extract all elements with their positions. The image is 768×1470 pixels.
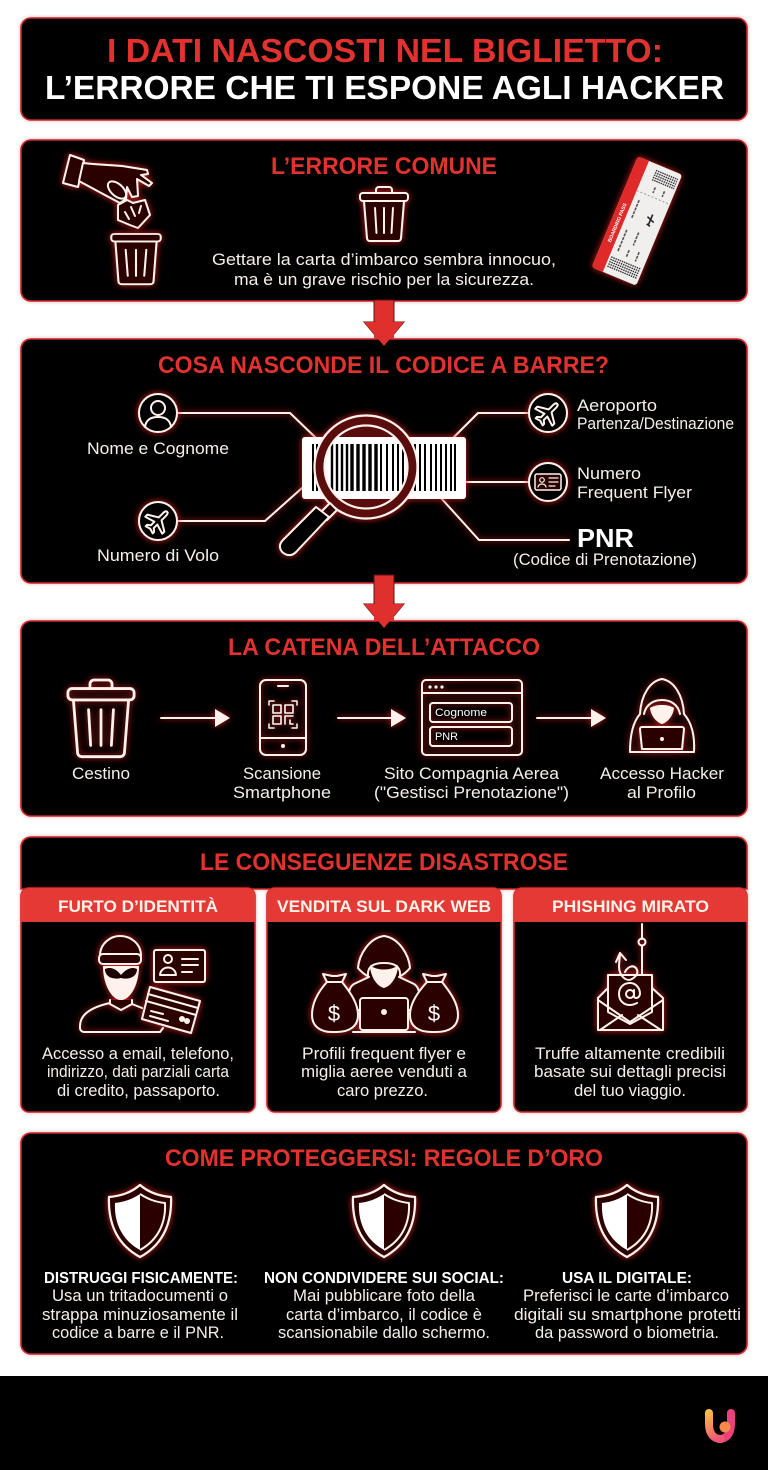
- panel: barcode data: [21, 322, 747, 583]
- icon: smartphone: [260, 680, 306, 755]
- text: rule 3: digitali su smartphone protetti: [514, 1305, 741, 1324]
- barcode with magnifier: [280, 416, 466, 555]
- panel: protection: [21, 1133, 747, 1354]
- label: frequent flyer: [577, 464, 692, 502]
- labels: chain: Sito Compagnia Aerea: [384, 764, 560, 783]
- card: furto d'identità: [21, 888, 255, 1112]
- icon: thief with cards: [80, 936, 205, 1033]
- text: dark web: caro prezzo.: [337, 1081, 428, 1100]
- arrow: overlap of second arrow: [364, 604, 404, 628]
- icon: hand dropping paper: [63, 155, 152, 228]
- text: rule 1: DISTRUGGI FISICAMENTE:: [44, 1270, 238, 1287]
- label: aeroporto: Aeroporto: [577, 396, 657, 415]
- label: nome e cognome: Nome e Cognome: [87, 439, 229, 458]
- card: furto d'identità: FURTO D’IDENTITÀ: [58, 897, 218, 916]
- text: rule 1: codice a barre e il PNR.: [52, 1323, 224, 1342]
- panel: attack chain: [21, 604, 747, 816]
- arrow: chain 3: [537, 709, 606, 727]
- labels: chain: [72, 764, 724, 802]
- icon: trash under hand: [111, 234, 161, 284]
- icon: shield 1: [109, 1185, 171, 1257]
- icon: plane left: [139, 502, 177, 540]
- text: description: Gettare la carta d’imbarco sembra innocuo,: [212, 250, 556, 269]
- text: phishing: Truffe altamente credibili: [535, 1044, 725, 1063]
- text: dark web: [301, 1044, 468, 1100]
- text: rule 2: scansionabile dallo schermo.: [278, 1323, 490, 1342]
- text: phishing: del tuo viaggio.: [574, 1081, 686, 1100]
- browser field labels: [435, 707, 487, 743]
- text: rule 1: Usa un tritadocumenti o: [52, 1286, 228, 1305]
- dollar signs: $: [328, 1001, 340, 1026]
- arrow: overlap of first arrow: [364, 322, 404, 346]
- text: dark web: Profili frequent flyer e: [302, 1044, 466, 1063]
- heading: l'errore comune: L’ERRORE COMUNE: [271, 153, 497, 180]
- icon: browser window: [422, 680, 522, 755]
- icon: boarding pass: BOARDING PASS: [607, 202, 629, 243]
- dollar signs: $: [428, 1001, 440, 1026]
- text: dark web: miglia aeree venduti a: [301, 1062, 468, 1081]
- text: rule 2: [264, 1270, 504, 1342]
- label: pnr: PNR: [577, 523, 634, 553]
- labels: chain: al Profilo: [627, 783, 696, 802]
- text: rule 2: NON CONDIVIDERE SUI SOCIAL:: [264, 1270, 504, 1287]
- label: numero di volo: Numero di Volo: [97, 546, 219, 565]
- arrow: chain 1: [161, 709, 230, 727]
- text: rule 1: [42, 1270, 238, 1342]
- text: rule 3: Preferisci le carte d’imbarco: [523, 1286, 729, 1305]
- card: phishing: PHISHING MIRATO: [552, 897, 709, 916]
- arrow: first down arrow: [364, 300, 404, 346]
- icon: boarding pass: [592, 156, 682, 286]
- text: furto: indirizzo, dati parziali carta: [47, 1062, 229, 1081]
- icon: plane right: [529, 394, 567, 432]
- label: frequent flyer: Numero: [577, 464, 641, 483]
- barcode bars: [313, 444, 455, 491]
- label: pnr: [513, 523, 697, 569]
- text: furto: [42, 1044, 234, 1100]
- icon: hacker with money bags: [312, 936, 458, 1032]
- connector lines: [178, 413, 569, 540]
- arrow: second down arrow: [364, 575, 404, 628]
- panel: title: [21, 18, 747, 120]
- title line 1: I DATI NASCOSTI NEL BIGLIETTO:: [107, 32, 663, 69]
- arrow: chain 2: [338, 709, 406, 727]
- text: rule 2: carta d’imbarco, il codice è: [286, 1305, 482, 1324]
- text: description: [212, 250, 556, 289]
- text: rule 2: Mai pubblicare foto della: [293, 1286, 476, 1305]
- label: aeroporto: Partenza/Destinazione: [577, 414, 734, 433]
- label: frequent flyer: Frequent Flyer: [577, 483, 692, 502]
- browser field labels: PNR: [435, 731, 458, 743]
- text: furto: di credito, passaporto.: [57, 1081, 220, 1100]
- labels: chain: Accesso Hacker: [600, 764, 724, 783]
- heading: protection: COME PROTEGGERSI: REGOLE D’ORO: [165, 1145, 603, 1172]
- icon: logo: [709, 1413, 731, 1439]
- browser field labels: Cognome: [435, 707, 487, 719]
- icon: hooded hacker: [630, 679, 694, 752]
- icon: phishing hook and envelope: [598, 924, 663, 1030]
- text: rule 3: da password o biometria.: [535, 1323, 719, 1342]
- icon: person: [139, 394, 177, 432]
- text: phishing: basate sui dettagli precisi: [534, 1062, 726, 1081]
- icon: center trash: [360, 187, 408, 241]
- text: furto: Accesso a email, telefono,: [42, 1044, 234, 1063]
- text: description: ma è un grave rischio per la sicurezza.: [234, 270, 534, 289]
- label: aeroporto: [577, 396, 734, 433]
- heading: consequences: LE CONSEGUENZE DISASTROSE: [200, 849, 568, 876]
- dollar signs: [328, 1001, 440, 1026]
- icon: shield 3: [596, 1185, 658, 1257]
- icon: frequent flyer card: [529, 463, 567, 501]
- card: dark web: VENDITA SUL DARK WEB: [277, 897, 491, 916]
- card: dark web: [267, 888, 501, 1112]
- heading: attack chain: LA CATENA DELL’ATTACCO: [228, 634, 540, 661]
- panel: consequences: [21, 837, 747, 1112]
- text: phishing: [534, 1044, 726, 1100]
- icon: big trash: [68, 680, 134, 757]
- card: phishing: [514, 888, 747, 1112]
- title line 2: L’ERRORE CHE TI ESPONE AGLI HACKER: [45, 69, 724, 106]
- panel: l'errore comune: [21, 140, 747, 301]
- heading: barcode: COSA NASCONDE IL CODICE A BARRE?: [158, 352, 609, 379]
- text: rule 1: strappa minuziosamente il: [42, 1305, 238, 1324]
- labels: chain: Scansione: [243, 764, 321, 783]
- labels: chain: Cestino: [72, 764, 130, 783]
- text: rule 3: USA IL DIGITALE:: [562, 1270, 692, 1287]
- label: pnr: (Codice di Prenotazione): [513, 550, 697, 569]
- labels: chain: Smartphone: [233, 783, 331, 802]
- icon: shield 2: [353, 1185, 415, 1257]
- labels: chain: ("Gestisci Prenotazione"): [374, 783, 569, 802]
- text: rule 3: [514, 1270, 741, 1342]
